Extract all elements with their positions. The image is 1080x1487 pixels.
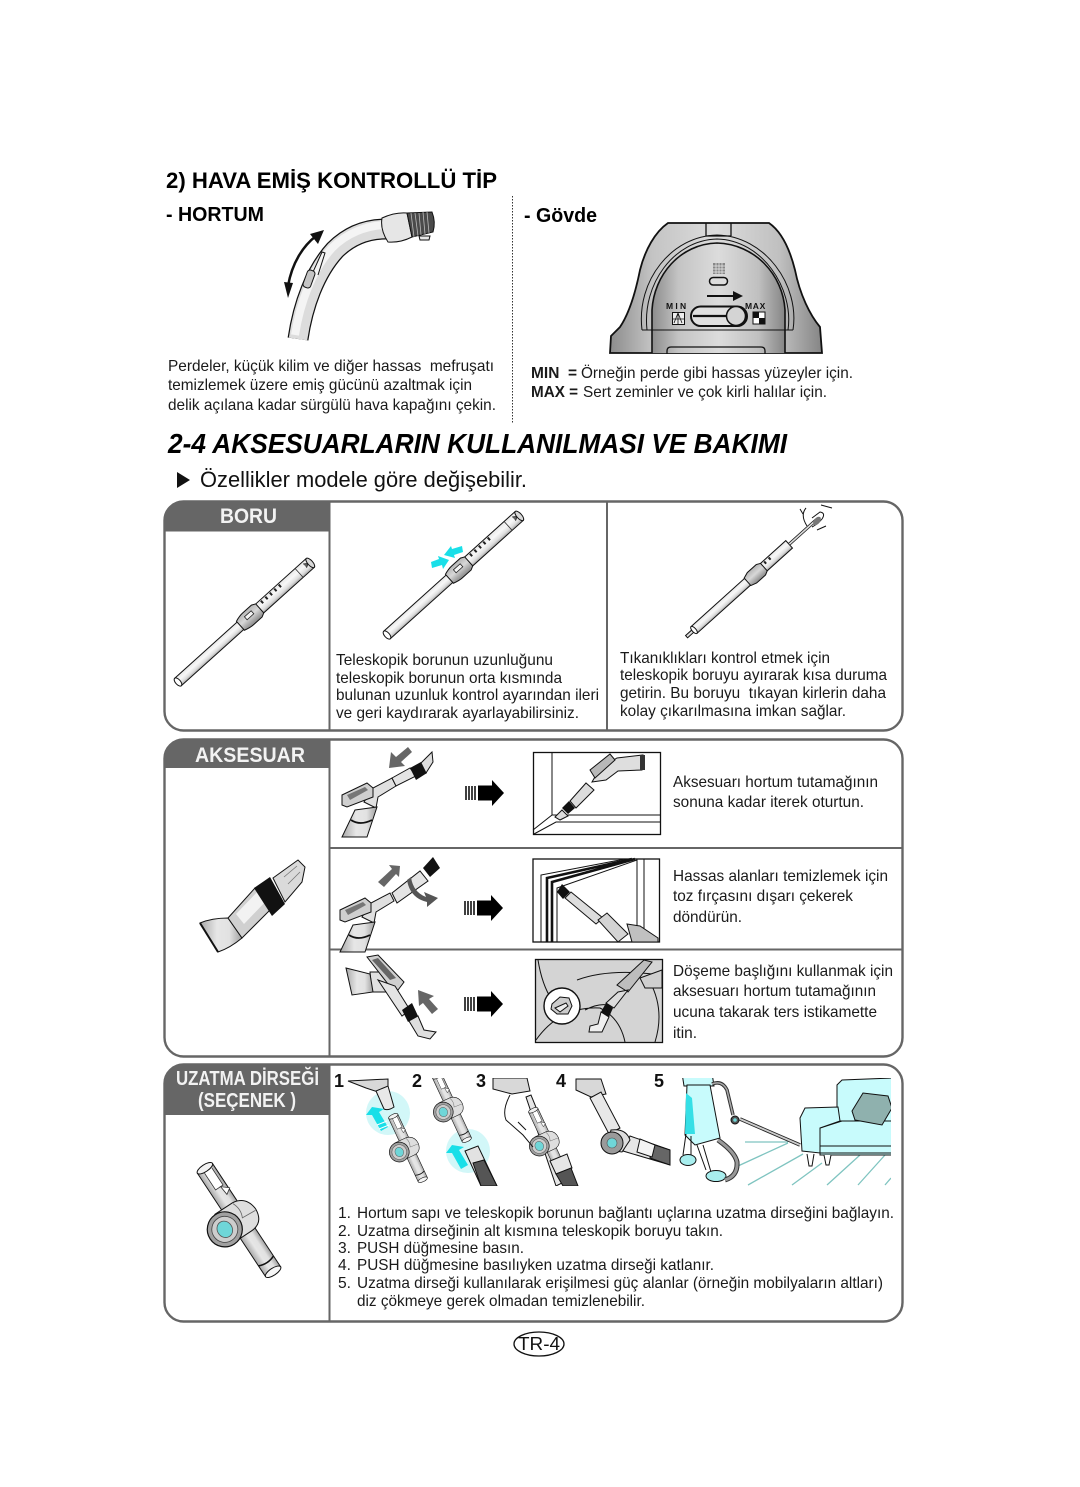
step numbers: 1 <box>334 1071 344 1091</box>
text: accessory step 2 <box>673 868 888 926</box>
page number <box>514 1332 564 1356</box>
arrow row 2 <box>465 895 503 921</box>
header: uzatma dirseği (seçenek): UZATMA DİRSEĞİ <box>176 1066 319 1090</box>
text: accessory step 2: Hassas alanları temizlemek için <box>673 868 888 885</box>
illustration: crevice tool accessory <box>200 860 305 952</box>
text: min and max explanation: Sert zeminler ve çok kirli halılar için. <box>583 384 827 401</box>
step 1 illustration <box>348 1078 428 1183</box>
numbered instructions <box>338 1205 894 1310</box>
text: clearing blockages: getirin. Bu boruyu tıkayan kirlerin daha <box>620 685 886 702</box>
text: accessory step 3: ucuna takarak ters istikamette <box>673 1004 877 1021</box>
header: boru <box>165 502 329 530</box>
illustration: vacuum body with min/max slider: MAX <box>745 301 766 311</box>
text: min and max explanation: Örneğin perde gibi hassas yüzeyler için. <box>581 364 853 382</box>
numbered instructions: 2. <box>338 1223 351 1240</box>
numbered instructions: 1. <box>338 1205 351 1222</box>
illustration: extension elbow <box>174 1154 292 1294</box>
illustration: hose handle with slider <box>284 212 434 339</box>
text: min and max explanation: MIN = <box>531 365 577 382</box>
numbered instructions: diz çökmeye gerek olmadan temizlenebilir. <box>357 1293 645 1310</box>
text: adjust pipe length: Teleskopik borunun uzunluğunu <box>336 652 553 669</box>
text: adjust pipe length: teleskopik borunun orta kısmında <box>336 670 562 687</box>
text: accessory step 3 <box>673 963 893 1042</box>
illustration: telescopic pipe <box>171 555 317 690</box>
header: boru: BORU <box>220 505 277 528</box>
numbered instructions: Uzatma dirseği kullanılarak erişilmesi güç alanlar (örneğin mobilyaların altları) <box>357 1275 883 1292</box>
illustration: vacuum body with min/max slider: MIN <box>666 301 688 311</box>
numbered instructions: PUSH düğmesine basın. <box>357 1240 524 1257</box>
step 4 illustration <box>576 1079 670 1165</box>
header: uzatma dirseği (seçenek): (SEÇENEK ) <box>198 1090 296 1112</box>
illustration: vacuum body with min/max slider <box>610 223 822 354</box>
text: accessory step 3: itin. <box>673 1025 697 1042</box>
row 2 hand tool with rotate arrow <box>340 857 440 952</box>
step 3 illustration <box>493 1078 578 1186</box>
text: clearing blockages: Tıkanıklıkları kontrol etmek için <box>620 650 830 667</box>
step numbers: 5 <box>654 1071 664 1091</box>
row 2 result: cleaning door frame <box>533 859 660 942</box>
numbered instructions: 4. <box>338 1257 351 1274</box>
text: accessory step 1: Aksesuarı hortum tutamağının <box>673 774 878 791</box>
numbered instructions: PUSH düğmesine basılıyken uzatma dirseği katlanır. <box>357 1257 714 1274</box>
row 1 hand tool with arrow <box>342 747 433 837</box>
section heading: hava emiş kontrollü tip: 2) HAVA EMİŞ KONTROLLÜ TİP <box>166 168 497 193</box>
text: adjust pipe length <box>336 652 599 722</box>
text: min and max explanation <box>531 364 853 401</box>
header: aksesuar <box>165 740 329 768</box>
subheading: gövde: - Gövde <box>524 204 597 227</box>
text: accessory step 3: aksesuarı hortum tutamağının <box>673 983 876 1000</box>
numbered instructions: Hortum sapı ve teleskopik borunun bağlantı uçlarına uzatma dirseğini bağlayın. <box>357 1205 894 1222</box>
text: accessory step 1 <box>673 774 878 811</box>
text: clearing blockages: kolay çıkarılmasına imkan sağlar. <box>620 703 846 720</box>
text: accessory step 3: Döşeme başlığını kullanmak için <box>673 963 893 980</box>
text: accessory step 2: döndürün. <box>673 909 742 926</box>
page number: TR-4 <box>518 1334 560 1354</box>
text: accessory step 2: toz fırçasını dışarı çekerek <box>673 888 853 905</box>
text: hortum instructions: temizlemek üzere emiş gücünü azaltmak için <box>168 377 472 394</box>
row 3 hand tool with arrow <box>346 955 438 1039</box>
header: aksesuar: AKSESUAR <box>195 744 305 767</box>
panel: aksesuar <box>164 740 903 1056</box>
arrow row 1 <box>466 780 504 806</box>
step numbers: 4 <box>556 1071 566 1091</box>
arrow row 3 <box>465 991 503 1017</box>
step 5 illustration: person vacuuming under sofa <box>680 1073 892 1185</box>
main title: 2-4 AKSESUARLARIN KULLANILMASI VE BAKIMI <box>167 428 788 459</box>
text: hortum instructions: delik açılana kadar sürgülü hava kapağını çekin. <box>168 397 496 414</box>
subheading: hortum: - HORTUM <box>166 203 264 226</box>
illustration: pipe with length adjuster arrows <box>380 508 526 643</box>
panel: uzatma dirseği <box>164 1064 902 1322</box>
text: accessory step 1: sonuna kadar iterek oturtun. <box>673 794 864 811</box>
text: adjust pipe length: bulunan uzunluk kontrol ayarından ileri <box>336 687 599 704</box>
row 3 result: cleaning upholstery <box>536 960 662 1042</box>
text: hortum instructions: Perdeler, küçük kilim ve diğer hassas mefruşatı <box>168 358 494 375</box>
header: uzatma dirseği (seçenek) <box>165 1065 329 1115</box>
step numbers <box>334 1071 664 1091</box>
numbered instructions: 5. <box>338 1275 351 1292</box>
text: clearing blockages: teleskopik boruyu ayırarak kısa duruma <box>620 667 887 684</box>
panel: boru <box>164 502 902 730</box>
text: clearing blockages <box>620 650 887 720</box>
text: adjust pipe length: ve geri kaydırarak ayarlayabilirsiniz. <box>336 705 579 722</box>
numbered instructions: 3. <box>338 1240 351 1257</box>
illustration: shortened pipe with cleaning hand <box>682 505 832 642</box>
text: hortum instructions <box>168 358 496 414</box>
note: features vary by model: Özellikler modele göre değişebilir. <box>200 467 527 492</box>
numbered instructions: Uzatma dirseğinin alt kısmına teleskopik boruyu takın. <box>357 1223 723 1240</box>
row 1 result: cleaning window corner <box>533 752 660 834</box>
text: min and max explanation: MAX = <box>531 384 578 401</box>
step numbers: 3 <box>476 1071 486 1091</box>
step numbers: 2 <box>412 1071 422 1091</box>
step 2 illustration <box>432 1078 498 1186</box>
